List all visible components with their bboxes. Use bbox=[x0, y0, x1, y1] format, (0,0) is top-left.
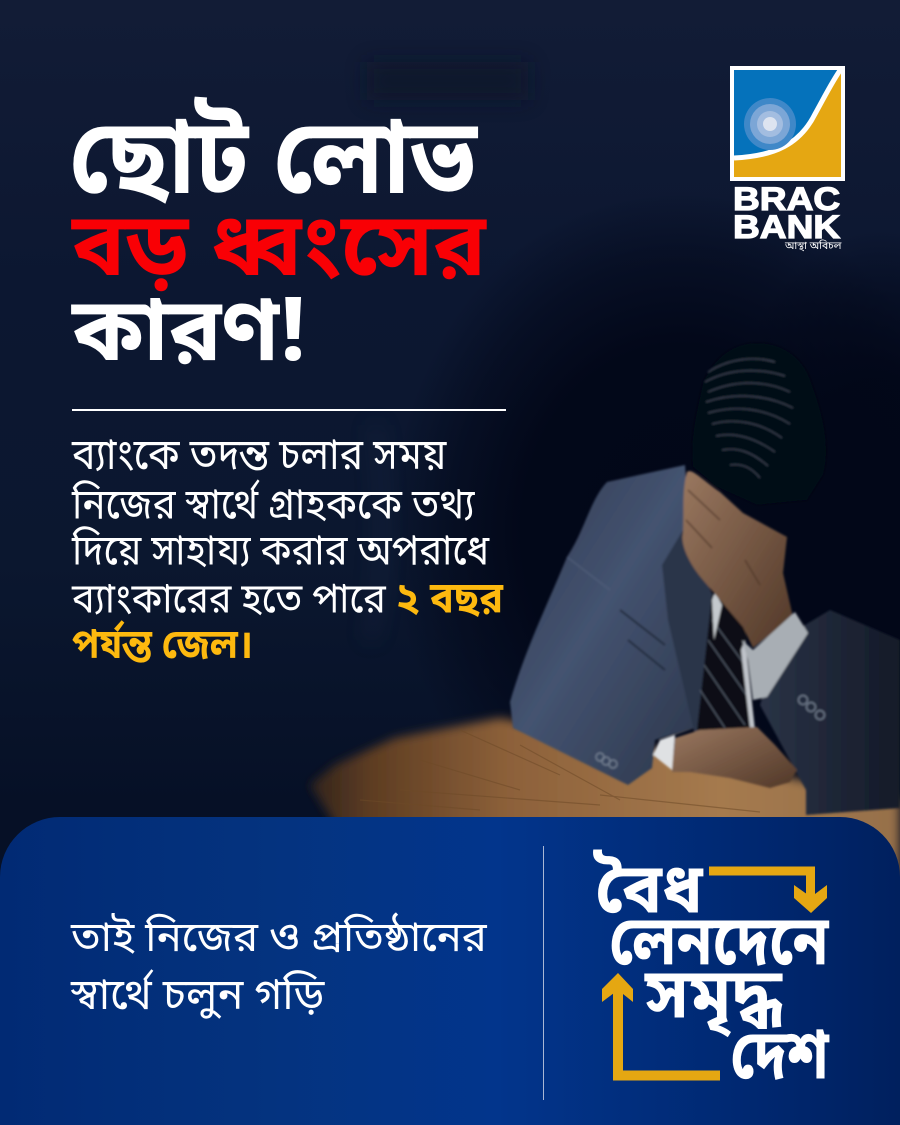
campaign word 2: লেনদেনে bbox=[609, 902, 829, 994]
body text: নিজের স্বার্থে গ্রাহককে তথ্য bbox=[72, 480, 475, 536]
panel divider bbox=[543, 846, 544, 1100]
body text: ব্যাংকারের হতে পারে ২ বছর bbox=[72, 574, 503, 631]
body text bbox=[72, 431, 504, 676]
body text: দিয়ে সাহায্য করার অপরাধে bbox=[72, 526, 489, 582]
right sleeve bbox=[760, 610, 900, 815]
logo: BRAC Bank bbox=[730, 66, 845, 254]
divider rule bbox=[72, 409, 506, 410]
campaign logo bbox=[593, 850, 830, 1108]
logo tagline: আস্থা অবিচল bbox=[785, 240, 841, 254]
bottom panel bbox=[0, 817, 900, 1125]
campaign word 4: দেশ bbox=[730, 1016, 829, 1108]
logo mark bbox=[730, 66, 845, 181]
left cuff bbox=[653, 727, 697, 770]
title line 1: ছোট লোভ bbox=[69, 96, 477, 236]
campaign arrows bbox=[602, 866, 827, 1080]
lower hand bbox=[672, 727, 797, 788]
hair bbox=[692, 343, 826, 505]
body text: ব্যাংকে তদন্ত চলার সময় bbox=[72, 431, 446, 488]
title line 3: কারণ! bbox=[72, 279, 307, 396]
body text: পর্যন্ত জেল। bbox=[72, 622, 253, 676]
logo wordmark bbox=[733, 181, 841, 245]
jacket cuff buttons bbox=[596, 696, 824, 768]
jacket body bbox=[510, 465, 712, 785]
campaign word 1: বৈধ bbox=[595, 850, 703, 942]
logo wordmark: BANK bbox=[733, 209, 840, 245]
hand on face bbox=[682, 471, 793, 648]
bottom call to action: স্বার্থে চলুন গড়ি bbox=[71, 970, 324, 1027]
bottom call to action bbox=[70, 912, 488, 1027]
campaign word 3: সমৃদ্ধ bbox=[645, 955, 782, 1047]
shirt cuff bbox=[742, 612, 808, 700]
logo wordmark: BRAC bbox=[733, 181, 840, 217]
title bbox=[69, 96, 487, 396]
title line 2: বড় ধ্বংসের bbox=[72, 194, 486, 311]
shirt and tie bbox=[697, 592, 755, 730]
table bbox=[310, 718, 900, 890]
bottom call to action: তাই নিজের ও প্রতিষ্ঠানের bbox=[71, 913, 487, 969]
